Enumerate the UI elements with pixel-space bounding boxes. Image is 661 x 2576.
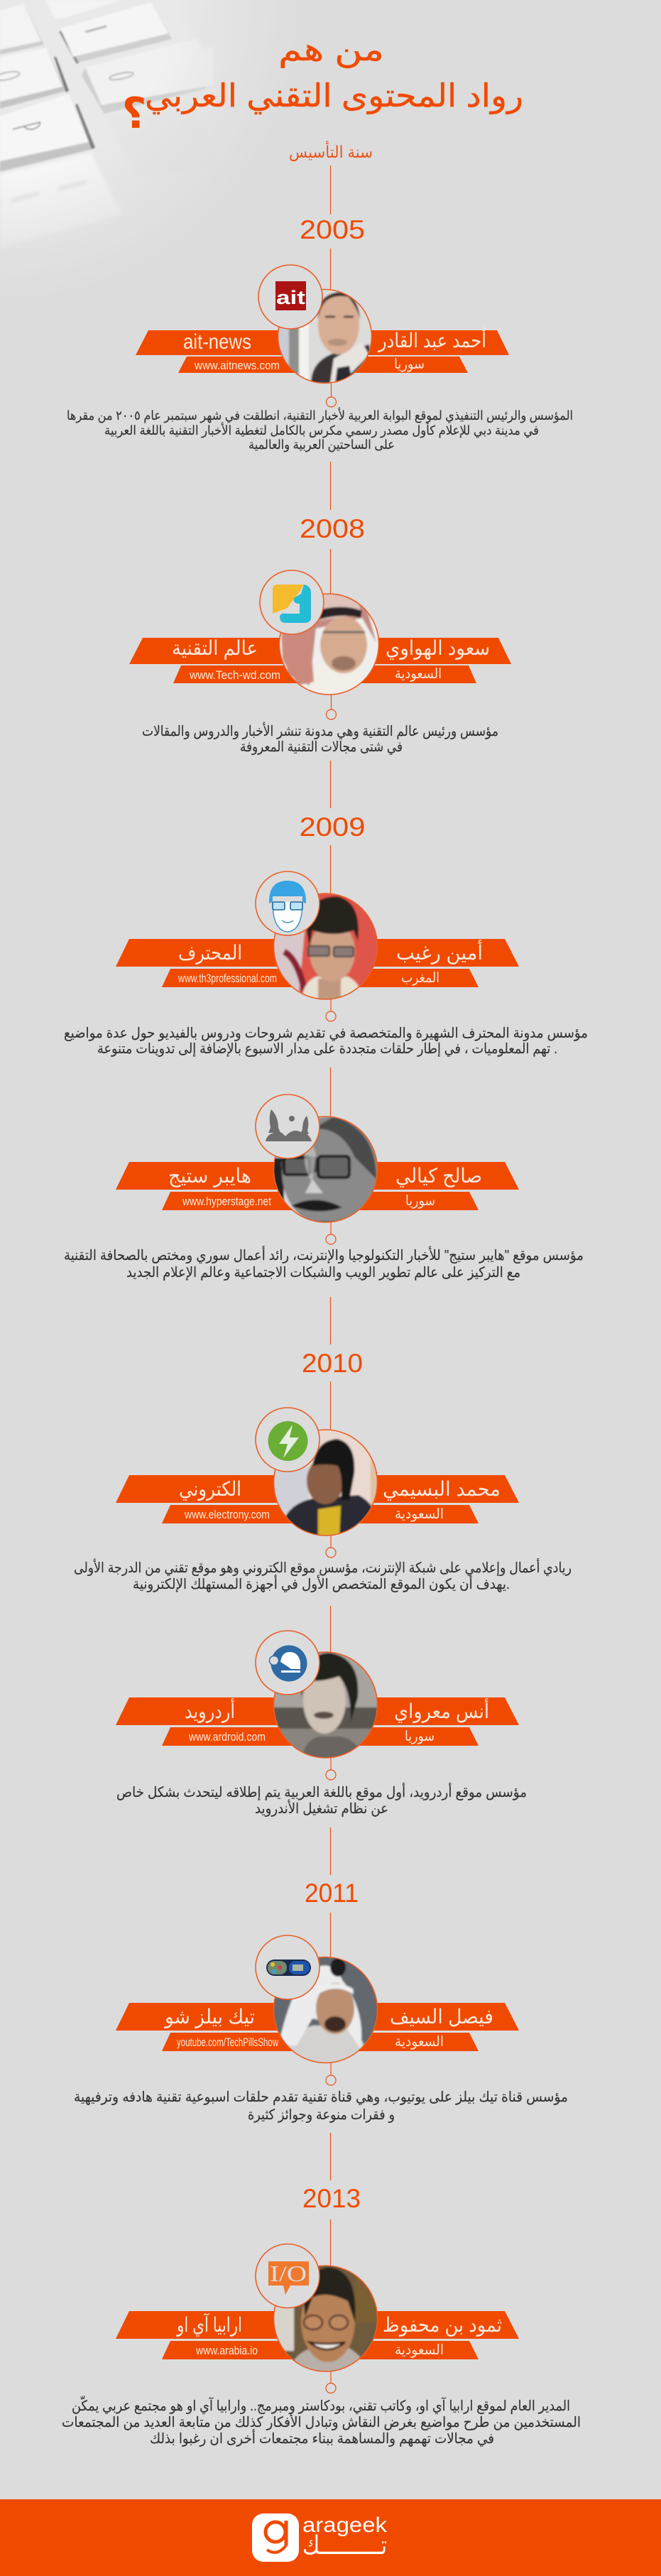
logo: electrony xyxy=(256,1408,319,1472)
description xyxy=(64,1026,588,1058)
logo: ardroid xyxy=(256,1631,319,1695)
description xyxy=(74,1558,572,1593)
band labels xyxy=(163,2006,493,2050)
band labels: ثمود بن محفوظ xyxy=(383,2314,502,2337)
band labels: سوريا xyxy=(405,1193,435,1209)
ribbons xyxy=(136,330,509,373)
panel: 2009 Saleh Kayali xyxy=(64,1094,584,1281)
panel: 2008 Saud Alhawawi xyxy=(129,514,511,756)
band labels: www.arabia.io xyxy=(195,2344,258,2357)
keyboard background image xyxy=(0,0,324,324)
panel: 2013 Thamood bin Mahfouz xyxy=(62,2184,581,2447)
portrait xyxy=(278,593,381,696)
logo: arabia.io xyxy=(256,2244,319,2308)
description: ريادي أعمال وإعلامي على شبكة الإنترنت، مؤسس موقع الكتروني وهو موقع تقني من الدرجة الأولى xyxy=(74,1558,572,1577)
description: مؤسس ورئيس عالم التقنية وهي مدونة تنشر الأخبار والدروس والمقالات xyxy=(142,722,498,740)
band labels: سوريا xyxy=(394,357,425,372)
description: المؤسس والرئيس التنفيذي لموقع البوابة العربية لأخبار التقنية، انطلقت في شهر سبتمبر عام ٢٠٠٥ من مقرها xyxy=(67,408,573,423)
band labels: أردرويد xyxy=(185,1697,235,1723)
ribbons xyxy=(116,2311,519,2359)
band labels: youtube.com/TechPillsShow xyxy=(177,2036,278,2049)
year 2010: 2010 xyxy=(302,1349,363,1378)
connector dot xyxy=(326,1222,336,1244)
logo: hyperstage rockets xyxy=(256,1094,319,1158)
band labels: أحمد عبد القادر xyxy=(377,327,486,352)
band labels: أمين رغيب xyxy=(396,939,483,964)
year 2013: 2013 xyxy=(302,2184,361,2213)
portrait xyxy=(273,2264,379,2374)
connector dot xyxy=(327,384,337,407)
ribbons xyxy=(116,1475,519,1523)
band labels xyxy=(179,1478,501,1522)
description: مع التركيز على عالم تطوير الويب والشبكات الاجتماعية وعالم الإعلام الجديد xyxy=(126,1265,520,1281)
description: مؤسس موقع أردرويد، أول موقع باللغة العربية يتم إطلاقه ليتحدث بشكل خاص xyxy=(116,1783,527,1801)
description: المدير العام لموقع ارابيا آي او، وكاتب تقني، بودكاستر ومبرمج.. وارابيا آي او هو مجتمع عربي يمكّن xyxy=(72,2396,570,2415)
title xyxy=(122,31,523,137)
description: على الساحتين العربية والعالمية xyxy=(248,438,395,452)
description: مؤسس مدونة المحترف الشهيرة والمتخصصة في تقديم شروحات ودروس بالفيديو حول عدة مواضيع xyxy=(64,1026,588,1042)
logo: arageek wordmark: تــــــــــك xyxy=(302,2531,387,2560)
title: ؟ xyxy=(122,89,146,137)
title: رواد المحتوى التقني العربي xyxy=(145,77,523,115)
connector dot xyxy=(326,999,336,1021)
year 2011: 2011 xyxy=(305,1879,359,1908)
logo: ait xyxy=(258,265,322,329)
band labels: عالم التقنية xyxy=(172,637,258,660)
portrait xyxy=(278,291,371,383)
logo: arageek icon xyxy=(252,2513,299,2562)
year 2009: 2009 xyxy=(300,813,365,842)
band labels: www.th3professional.com xyxy=(177,972,277,985)
ribbons xyxy=(129,638,511,683)
logo: arageek wordmark xyxy=(302,2513,388,2560)
logo: arageek wordmark: arageek xyxy=(302,2513,388,2537)
band labels: سوريا xyxy=(405,1729,435,1744)
band labels xyxy=(172,637,490,682)
logo: arabia.io: I/O xyxy=(270,2261,307,2286)
description: المستخدمين من طرح مواضيع بغرض النقاش وتبادل الأفكار كذلك من متابعة العديد من المجتمعات xyxy=(62,2413,581,2430)
connector dot xyxy=(327,695,337,719)
band labels: المغرب xyxy=(401,970,439,986)
panel: 2011 Faisal Alsaif xyxy=(74,1879,568,2123)
description xyxy=(62,2396,581,2447)
ribbons xyxy=(116,1162,519,1210)
band labels xyxy=(185,1697,489,1744)
description: مؤسس قناة تيك بيلز على يوتيوب، وهي قناة تقنية تقدم حلقات اسبوعية تقنية هادفه وترفيهية xyxy=(74,2089,568,2106)
portrait xyxy=(274,1116,377,1222)
description: مؤسس موقع "هايبر ستيج" للأخبار التكنولوجيا والإنترنت، رائد أعمال سوري ومختص بالصحافة التقنية xyxy=(64,1246,584,1264)
description: عن نظام تشغيل الأندرويد xyxy=(255,1800,388,1817)
logo: professional face xyxy=(256,871,319,935)
panel: 2009 Amine Raghib xyxy=(64,813,588,1058)
band labels: www.Tech-wd.com xyxy=(189,668,280,682)
description: و فقرات منوعة وجوائز كثيرة xyxy=(248,2107,395,2123)
band labels: صالح كيالي xyxy=(395,1165,482,1188)
description: في شتى مجالات التقنية المعروفة xyxy=(240,739,403,756)
footer band xyxy=(0,2499,661,2576)
timeline lines xyxy=(329,165,331,2266)
band labels: المحترف xyxy=(178,942,242,964)
description xyxy=(67,408,573,452)
band labels: سعود الهواوي xyxy=(386,637,490,660)
portrait xyxy=(273,892,379,1001)
description: في مجالات تهمهم والمساهمة ببناء مجتمعات أخرى ان رغبوا بذلك xyxy=(150,2429,494,2447)
panel: 2010 Mohamed Albasimi xyxy=(74,1349,572,1593)
band labels: السعودية xyxy=(395,2034,444,2050)
logo: tech-wd xyxy=(260,570,324,634)
connector dot xyxy=(326,2371,336,2393)
description: . تهم المعلوميات ، في إطار حلقات متجددة على مدار الاسبوع بالإضافة إلى تدوينات متنوعة xyxy=(97,1041,557,1058)
logo: tech pills xyxy=(256,1935,319,1999)
band labels xyxy=(168,1165,482,1209)
band labels: ait-news xyxy=(183,330,251,354)
ribbons xyxy=(116,2003,519,2051)
description: في مدينة دبي للإعلام كأول مصدر رسمي مكرس بالكامل لتغطية الأخبار التقنية باللغة العربية xyxy=(104,421,539,438)
band labels: www.hyperstage.net xyxy=(182,1195,271,1208)
description: .يهدف أن يكون الموقع المتخصص الأول في أجهزة المستهلك الإلكترونية xyxy=(133,1575,510,1593)
portrait xyxy=(273,1956,379,2065)
description xyxy=(116,1783,527,1817)
band labels: أنس معرواي xyxy=(394,1697,489,1723)
band labels: السعودية xyxy=(395,2342,444,2358)
band labels: www.ardroid.com xyxy=(188,1730,266,1744)
year 2008: 2008 xyxy=(300,514,365,543)
band labels xyxy=(175,2313,502,2358)
panel: 2005 Ahmed Abdelkader xyxy=(67,215,573,452)
ribbons xyxy=(116,1697,519,1746)
logo: ait: ait xyxy=(276,287,305,308)
connector dot xyxy=(326,1758,336,1780)
band labels: www.electrony.com xyxy=(184,1508,270,1521)
band labels: السعودية xyxy=(395,666,442,682)
band labels: محمد البسيمي xyxy=(383,1478,501,1501)
band labels: تيك بيلز شو xyxy=(163,2006,255,2028)
band labels: ارابيا آي او xyxy=(175,2313,242,2337)
band labels: الكتروني xyxy=(179,1478,241,1501)
title: من هم xyxy=(278,31,384,68)
connector dot xyxy=(326,1536,336,1558)
band labels xyxy=(177,939,483,986)
band labels xyxy=(183,327,486,372)
description xyxy=(74,2089,568,2123)
connector dot xyxy=(326,2063,336,2085)
ribbons xyxy=(116,939,519,987)
band labels: فيصل السيف xyxy=(390,2006,493,2028)
portrait xyxy=(273,1428,380,1538)
subtitle: founding year: سنة التأسيس xyxy=(289,141,373,162)
band labels: www.aitnews.com xyxy=(194,359,280,372)
panel: 2010 Anas Maarawi xyxy=(116,1631,527,1817)
portrait xyxy=(273,1651,379,1761)
description xyxy=(64,1246,584,1281)
band labels: هايبر ستيج xyxy=(168,1165,251,1188)
description xyxy=(142,722,498,756)
band labels: السعودية xyxy=(395,1506,444,1522)
year 2005: 2005 xyxy=(300,215,365,244)
